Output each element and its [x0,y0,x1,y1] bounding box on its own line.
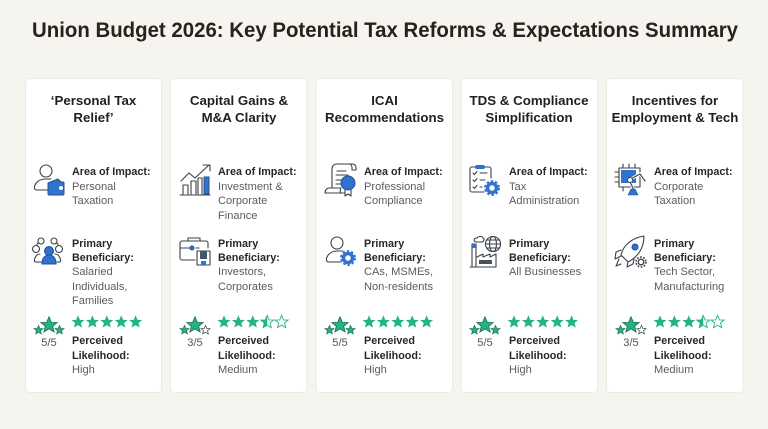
card heading [612,93,738,125]
primary beneficiary: Beneficiary: [364,252,426,264]
icon: rating stars [616,317,646,349]
icon: person with wallet [34,165,64,195]
perceived likelihood: Likelihood: [218,350,276,362]
area of impact: Area of Impact: [654,166,733,178]
primary beneficiary: Primary [654,238,694,250]
area of impact: Administration [509,195,579,207]
icon: family group [32,238,62,264]
panel: Capital Gains [170,78,307,392]
area of impact: Taxation [72,195,113,207]
area of impact [509,166,588,207]
area of impact [654,166,733,207]
perceived likelihood: Perceived [364,335,415,347]
icon: rating stars: 5/5 [41,337,57,349]
primary beneficiary [654,238,724,293]
area of impact [72,166,151,207]
perceived likelihood [72,335,130,376]
icon: rating stars: 5/5 [332,337,348,349]
icon: chip with robot arm [615,164,645,195]
panel: Incentives [606,78,743,392]
primary beneficiary: Primary [509,238,549,250]
icon: checklist with gear [470,165,499,195]
panel: Personal Tax Relief [26,78,162,392]
area of impact: Personal [72,181,116,193]
icon: briefcase with building [180,238,210,265]
primary beneficiary [72,238,134,307]
area of impact: Investment & [218,181,283,193]
card heading: Simplification [485,110,573,125]
primary beneficiary [364,238,434,293]
card heading [51,93,137,125]
perceived likelihood: Medium [654,364,693,376]
star rating [508,315,578,328]
primary beneficiary [509,238,582,278]
perceived likelihood: Likelihood: [654,350,712,362]
primary beneficiary: Manufacturing [654,281,724,293]
card heading: Recommendations [325,110,444,125]
icon: rating stars: 5/5 [477,337,493,349]
card heading: Capital Gains & [190,93,289,108]
icon: rating stars [325,317,355,349]
primary beneficiary: Individuals, [72,281,128,293]
perceived likelihood: Medium [218,364,257,376]
area of impact: Finance [218,210,257,222]
icon: certificate [325,164,356,196]
icon: rating stars [34,317,64,349]
perceived likelihood: Perceived [72,335,123,347]
icon: rocket with gear [615,236,646,267]
icon: rating stars [470,317,500,349]
panel: TDS [461,78,598,392]
perceived likelihood: Likelihood: [364,350,422,362]
primary beneficiary [218,238,280,293]
star rating [654,315,724,328]
primary beneficiary: Primary [72,238,112,250]
perceived likelihood: High [509,364,532,376]
icon: rating stars: 3/5 [187,337,203,349]
area of impact: Area of Impact: [72,166,151,178]
icon: rating stars [180,317,210,349]
area of impact: Corporate [218,195,267,207]
icon: growth chart [180,165,210,195]
area of impact: Area of Impact: [218,166,297,178]
card heading: TDS & Compliance [470,93,588,108]
primary beneficiary: Non-residents [364,281,434,293]
primary beneficiary: Beneficiary: [654,252,716,264]
perceived likelihood: Perceived [509,335,560,347]
card heading: ICAI [371,93,398,108]
star rating [218,315,288,328]
card heading: Incentives for [632,93,718,108]
icon: rating stars: 3/5 [623,337,639,349]
primary beneficiary: Primary [364,238,404,250]
star rating [72,315,142,328]
area of impact [218,166,297,222]
primary beneficiary: All Businesses [509,266,582,278]
icon: person with gear [326,237,355,265]
perceived likelihood [364,335,422,376]
primary beneficiary: Tech Sector, [654,266,715,278]
primary beneficiary: Beneficiary: [72,252,134,264]
card heading: Employment & Tech [612,110,738,125]
perceived likelihood [218,335,276,376]
primary beneficiary: Corporates [218,281,273,293]
perceived likelihood: Likelihood: [72,350,130,362]
primary beneficiary: Investors, [218,266,266,278]
star rating [362,315,433,328]
perceived likelihood: Perceived [654,335,705,347]
primary beneficiary: Families [72,295,114,307]
panel: ICAI [316,78,452,392]
card heading: Relief’ [73,110,114,125]
area of impact: Taxation [654,195,695,207]
primary beneficiary: CAs, MSMEs, [364,266,433,278]
perceived likelihood [654,335,712,376]
primary beneficiary: Beneficiary: [509,252,571,264]
icon: factory with globe [470,236,500,267]
area of impact [364,166,443,207]
card heading: ‘Personal Tax [51,93,137,108]
primary beneficiary: Beneficiary: [218,252,280,264]
card heading [325,93,444,125]
perceived likelihood: High [72,364,95,376]
area of impact: Professional [364,181,425,193]
area of impact: Tax [509,181,527,193]
area of impact: Corporate [654,181,703,193]
primary beneficiary: Primary [218,238,258,250]
area of impact: Compliance [364,195,423,207]
card heading [190,93,289,125]
card heading: M&A Clarity [202,110,277,125]
perceived likelihood: Perceived [218,335,269,347]
primary beneficiary: Salaried [72,266,113,278]
perceived likelihood [509,335,567,376]
perceived likelihood: High [364,364,387,376]
area of impact: Area of Impact: [509,166,588,178]
perceived likelihood: Likelihood: [509,350,567,362]
area of impact: Area of Impact: [364,166,443,178]
card heading [470,93,588,125]
title: Union Budget 2026: Key Potential Tax Reforms & Expectations Summary [32,19,738,42]
